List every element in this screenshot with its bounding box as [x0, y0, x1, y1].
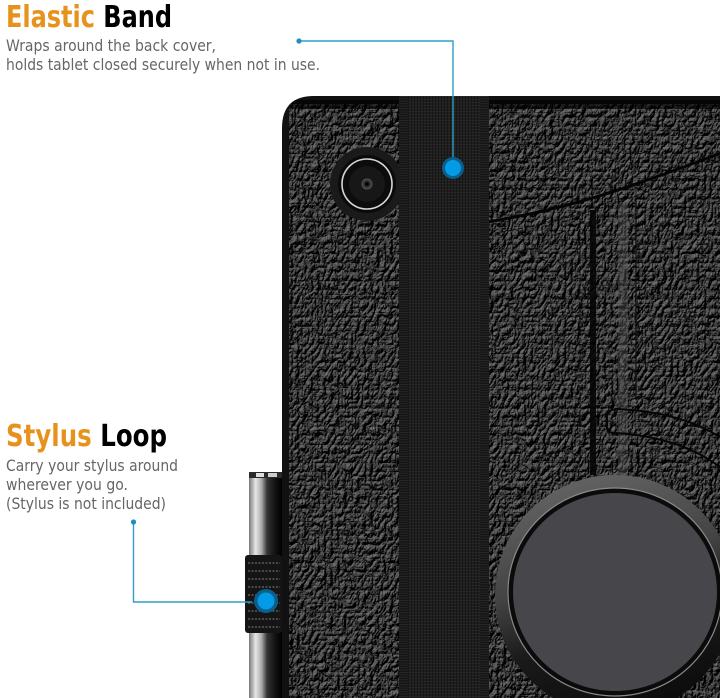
text: elastic band description: Wraps around the back cover, [6, 36, 216, 55]
leather texture [289, 100, 720, 698]
text: stylus loop description: Carry your stylus around [6, 456, 178, 475]
text: stylus loop description: (Stylus is not included) [6, 494, 166, 513]
pocket seams [487, 153, 720, 475]
stylus [245, 472, 282, 698]
camera [330, 147, 404, 221]
text: stylus loop description: wherever you go. [6, 475, 128, 494]
tablet case [282, 96, 720, 698]
text: elastic band description: holds tablet closed securely when not in use. [6, 55, 320, 74]
text: stylus loop description [6, 456, 178, 513]
text: elastic band description [6, 36, 320, 74]
heading: Elastic Band: Elastic Band [6, 0, 172, 35]
callout: elastic band [296, 38, 464, 179]
callout: stylus loop [131, 519, 278, 613]
stylus loop [245, 555, 282, 633]
elastic band [399, 96, 489, 698]
heading: Stylus Loop: Stylus Loop [6, 419, 167, 454]
rotating disc [495, 475, 720, 698]
